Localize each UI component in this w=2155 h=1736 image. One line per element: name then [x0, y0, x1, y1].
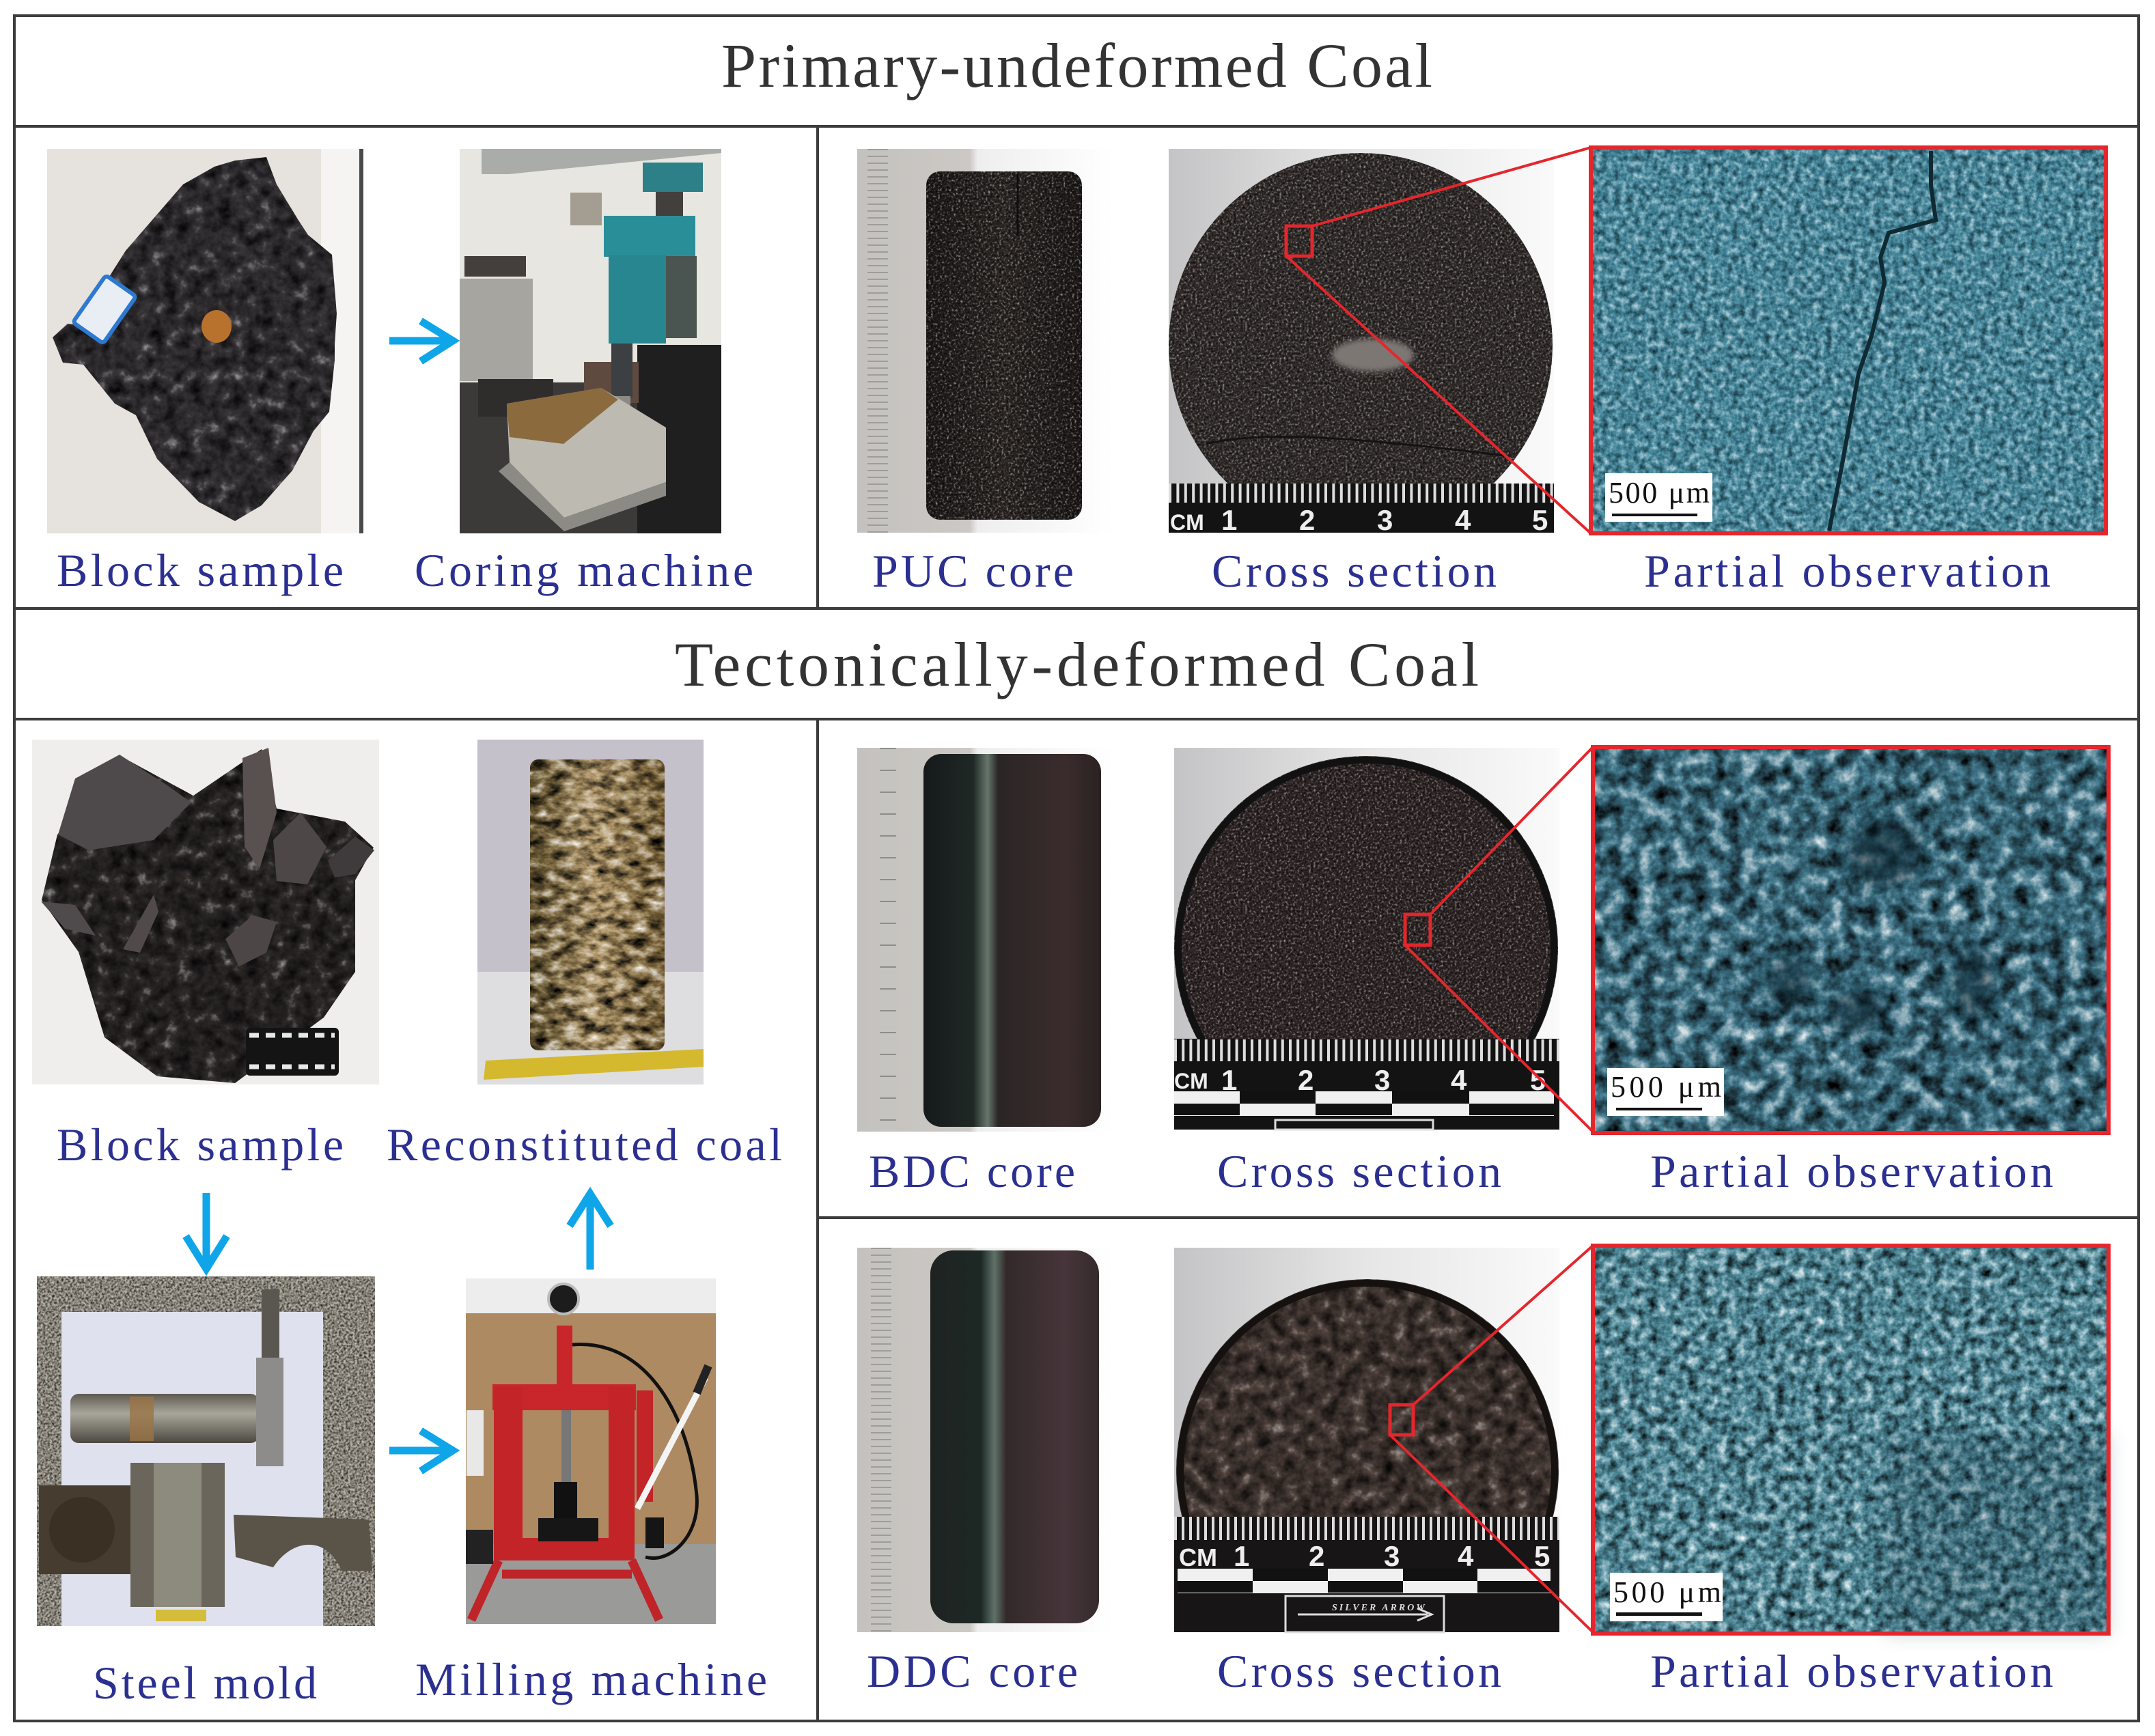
label: Coring machine: Coring machine — [415, 544, 753, 596]
photo: BDC core — [857, 748, 1113, 1132]
panel: primary-undeformed coal preparation — [47, 149, 753, 596]
photo: PUC block sample — [47, 149, 363, 533]
scale bar: 500 µm: 500 μm — [1609, 476, 1710, 509]
ruler: DDC scale: SILVER ARROW — [1332, 1603, 1427, 1613]
scale bar: 500 µm: 500 μm — [1611, 1070, 1721, 1104]
scale bar: 500 µm — [1610, 1573, 1723, 1621]
ruler: BDC scale: 5 — [1530, 1064, 1546, 1096]
label: Partial observation: Partial observation — [1644, 545, 2050, 597]
ruler: BDC scale: 1 — [1221, 1064, 1237, 1096]
photo: DDC partial observation micrograph — [1593, 1246, 2109, 1634]
heading: Primary-undeformed Coal: Primary-undeformed Coal — [721, 31, 1432, 100]
ruler: DDC scale: 1 — [1234, 1540, 1249, 1572]
ruler: PUC scale: 1 — [1221, 504, 1237, 536]
callout: red zoom box and lines — [1405, 747, 1593, 1132]
photo: DDC cross section — [1174, 1248, 1559, 1662]
heading: Tectonically-deformed Coal: Tectonically-deformed Coal — [675, 630, 1479, 699]
ruler: DDC scale: 5 — [1534, 1540, 1550, 1572]
ruler: PUC scale — [1169, 484, 1554, 536]
ruler: DDC scale: 2 — [1309, 1540, 1324, 1572]
label: Cross section: Cross section — [1217, 1145, 1501, 1197]
ruler: DDC scale: 4 — [1458, 1540, 1474, 1572]
ruler: BDC scale: 2 — [1298, 1064, 1313, 1096]
label: Cross section: Cross section — [1217, 1645, 1501, 1697]
photo: milling machine — [466, 1278, 716, 1624]
panel: PUC core observation — [857, 148, 2106, 597]
ruler: PUC scale: CM — [1170, 510, 1204, 535]
photo: BDC partial observation micrograph — [1593, 747, 2109, 1133]
scale bar: 500 µm — [1605, 473, 1712, 522]
ruler: PUC scale: 3 — [1377, 504, 1393, 536]
photo: steel mold — [37, 1276, 375, 1626]
ruler: BDC scale: CM — [1174, 1069, 1208, 1093]
photo: reconstituted coal — [477, 740, 704, 1084]
ruler: PUC scale: 4 — [1455, 504, 1471, 536]
label: Reconstituted coal: Reconstituted coal — [387, 1119, 782, 1171]
label: Block sample: Block sample — [57, 544, 344, 596]
photo: TDC block sample — [32, 740, 379, 1084]
panel: DDC core observation — [857, 1246, 2109, 1697]
ruler: BDC scale — [1174, 1039, 1559, 1130]
photo: PUC cross section — [1169, 149, 1554, 537]
arrow: block sample to steel mold — [186, 1193, 227, 1269]
label: Block sample: Block sample — [57, 1119, 344, 1171]
photo: DDC core — [857, 1248, 1113, 1632]
ruler: PUC scale: 5 — [1532, 504, 1548, 536]
ruler: PUC scale: 2 — [1299, 504, 1315, 536]
arrow: steel mold to milling machine — [389, 1431, 453, 1471]
photo: BDC cross section — [1174, 748, 1559, 1140]
panel: BDC core observation — [857, 747, 2109, 1197]
ruler: DDC scale: CM — [1179, 1543, 1217, 1571]
label: PUC core: PUC core — [872, 545, 1074, 597]
label: BDC core: BDC core — [869, 1145, 1075, 1197]
arrow: block sample to coring machine — [389, 321, 453, 361]
label: Partial observation: Partial observation — [1650, 1645, 2053, 1697]
label: Steel mold: Steel mold — [93, 1657, 317, 1709]
label: Milling machine: Milling machine — [415, 1653, 767, 1705]
photo: PUC partial observation micrograph — [1591, 148, 2106, 533]
scale bar: 500 µm: 500 μm — [1613, 1576, 1721, 1609]
label: Cross section: Cross section — [1212, 545, 1497, 597]
label: DDC core: DDC core — [867, 1645, 1078, 1697]
callout: red zoom box and lines — [1390, 1246, 1593, 1632]
arrow: milling machine to reconstituted coal — [570, 1194, 611, 1270]
ruler: BDC scale: 4 — [1451, 1064, 1467, 1096]
panel: tectonically-deformed coal reconstitution — [32, 740, 782, 1709]
ruler: DDC scale — [1174, 1517, 1559, 1632]
photo: PUC core — [857, 149, 1113, 533]
scale bar: 500 µm — [1607, 1068, 1724, 1116]
ruler: DDC scale: 3 — [1384, 1540, 1400, 1572]
photo: coring machine — [460, 149, 721, 533]
ruler: BDC scale: 3 — [1374, 1064, 1390, 1096]
callout: red zoom box and lines — [1286, 148, 1591, 533]
label: Partial observation: Partial observation — [1650, 1145, 2053, 1197]
